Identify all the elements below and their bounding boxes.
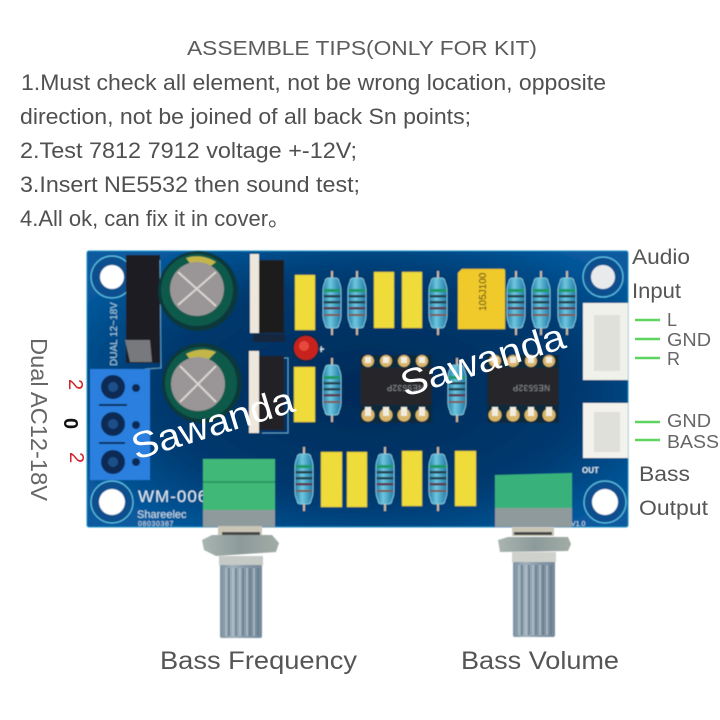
audio input label: Input bbox=[632, 280, 681, 303]
assembly instructions: 4.All ok, can fix it in cover。 bbox=[20, 206, 290, 231]
watermark left: Sawanda bbox=[126, 379, 299, 468]
bass volume label: Bass Volume bbox=[461, 647, 619, 675]
bass output label: Bass bbox=[639, 463, 690, 486]
NE5532 chips bbox=[360, 355, 559, 423]
circuit board bbox=[87, 251, 628, 528]
left potentiometer shaft bbox=[202, 526, 279, 638]
mounting holes bbox=[91, 256, 626, 523]
blue screw terminal bbox=[90, 369, 150, 480]
audio input label bbox=[632, 246, 690, 303]
power label: Dual AC12-18V bbox=[26, 338, 52, 502]
board silkscreen labels bbox=[109, 302, 599, 528]
assembly instructions: 1.Must check all element, not be wrong location, opposite bbox=[21, 70, 606, 95]
connector pin labels: BASS bbox=[667, 432, 719, 452]
LED bbox=[292, 334, 320, 362]
bass output label: Output bbox=[639, 497, 708, 520]
connector pin labels: R bbox=[667, 349, 680, 369]
connector pin labels: GND bbox=[667, 330, 711, 350]
connector pin labels: L bbox=[667, 310, 677, 330]
assembly instructions: 3.Insert NE5532 then sound test; bbox=[20, 172, 360, 197]
electrolytic capacitors bbox=[158, 251, 242, 423]
regulator heatsink bbox=[125, 255, 161, 369]
board silkscreen labels: V1.0 bbox=[571, 521, 586, 528]
watermark right: Sawanda bbox=[395, 316, 570, 405]
capacitor marking: 105J100 bbox=[478, 272, 489, 311]
power pin labels bbox=[59, 379, 87, 463]
power pin labels: 0 bbox=[59, 418, 81, 429]
connector pin labels bbox=[635, 310, 719, 452]
film capacitors bbox=[294, 269, 505, 507]
assembly instructions: direction, not be joined of all back Sn points; bbox=[20, 104, 471, 129]
board silkscreen labels: 08030387 bbox=[138, 521, 174, 528]
white connectors bbox=[583, 303, 628, 458]
right pot green body bbox=[495, 473, 572, 527]
connector pin labels: GND bbox=[667, 411, 711, 431]
board silkscreen labels: WM-006 bbox=[138, 487, 208, 506]
right potentiometer shaft bbox=[498, 527, 571, 637]
audio input label: Audio bbox=[632, 246, 690, 269]
pcb base bbox=[87, 251, 628, 527]
assembly instructions: 2.Test 7812 7912 voltage +-12V; bbox=[20, 138, 357, 163]
board silkscreen labels: Shareelec bbox=[137, 509, 187, 521]
bass output label bbox=[639, 463, 708, 520]
title: ASSEMBLE TIPS(ONLY FOR KIT) bbox=[187, 38, 537, 60]
board silkscreen labels: OUT bbox=[582, 466, 599, 475]
NE5532 chips: NE5532P bbox=[512, 383, 550, 392]
left pot green body bbox=[203, 459, 275, 527]
board silkscreen labels: + bbox=[318, 344, 324, 356]
resistors bbox=[295, 271, 576, 511]
TO-220 regulators bbox=[249, 254, 288, 433]
bass frequency label: Bass Frequency bbox=[160, 647, 358, 675]
NE5532 chips: NE5532P bbox=[386, 383, 424, 392]
assembly instructions bbox=[20, 70, 606, 231]
power pin labels: 2 bbox=[64, 379, 86, 390]
power pin labels: 2 bbox=[65, 452, 87, 463]
board silkscreen labels: DUAL 12~18V bbox=[109, 302, 120, 366]
